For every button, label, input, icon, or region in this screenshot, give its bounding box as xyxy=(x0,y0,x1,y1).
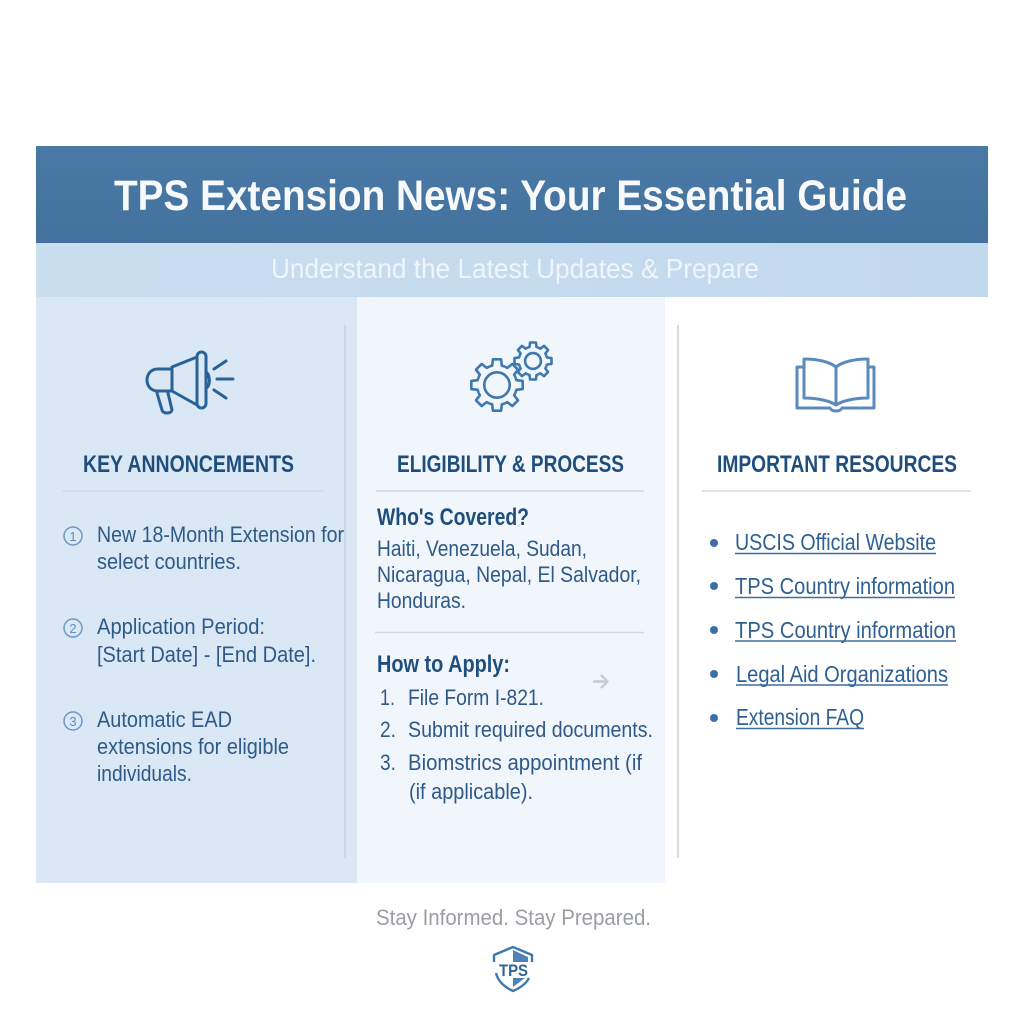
how to apply: 2. xyxy=(380,717,396,742)
who's covered: Who's Covered? xyxy=(377,504,529,531)
item 1: select countries. xyxy=(97,549,241,574)
icon: gears xyxy=(471,343,551,411)
how to apply xyxy=(377,651,653,804)
icon: open book xyxy=(797,359,874,411)
item 3 xyxy=(64,707,289,786)
item 1: 1 xyxy=(69,529,77,544)
heading: key announcements: KEY ANNONCEMENTS xyxy=(83,451,294,478)
item 3: extensions for eligible xyxy=(97,734,289,759)
who's covered: Haiti, Venezuela, Sudan, xyxy=(377,536,587,561)
how to apply: How to Apply: xyxy=(377,651,510,678)
heading: eligibility and process: ELIGIBILITY & PROCESS xyxy=(397,451,624,478)
panel: important resources xyxy=(678,325,971,858)
link: legal aid: Legal Aid Organizations xyxy=(736,661,948,687)
how to apply: Biomstrics appointment (if xyxy=(408,750,643,775)
link: TPS country information: TPS Country information xyxy=(735,573,955,599)
how to apply: File Form I-821. xyxy=(408,685,544,710)
arrow xyxy=(593,675,608,688)
panel: eligibility and process xyxy=(357,297,665,883)
item 2: [Start Date] - [End Date]. xyxy=(97,642,316,667)
title: TPS Extension News: Your Essential Guide xyxy=(114,172,907,220)
how to apply: (if applicable). xyxy=(409,779,533,804)
how to apply: Submit required documents. xyxy=(408,717,653,742)
icon: TPS shield xyxy=(494,947,532,991)
heading: important resources: IMPORTANT RESOURCES xyxy=(717,451,957,478)
item 1 xyxy=(64,522,344,574)
link: USCIS: USCIS Official Website xyxy=(735,529,936,555)
who's covered: Honduras. xyxy=(377,588,466,613)
how to apply: 3. xyxy=(380,750,396,775)
subtitle: Understand the Latest Updates & Prepare xyxy=(271,253,759,284)
link: TPS country information: TPS Country information xyxy=(735,617,956,643)
how to apply: 1. xyxy=(380,685,395,710)
item 3: Automatic EAD xyxy=(97,707,232,732)
item 3: 3 xyxy=(69,714,77,729)
who's covered xyxy=(377,504,641,613)
who's covered: Nicaragua, Nepal, El Salvador, xyxy=(377,562,641,587)
subtitle band xyxy=(36,243,988,297)
icon: megaphone xyxy=(147,352,233,413)
item 2 xyxy=(64,614,316,667)
icon: TPS shield: TPS xyxy=(499,961,528,980)
item 3: individuals. xyxy=(97,761,192,786)
footer tagline: Stay Informed. Stay Prepared. xyxy=(376,905,651,930)
item 1: New 18-Month Extension for xyxy=(97,522,344,547)
item 2: 2 xyxy=(69,621,77,636)
link: extension FAQ: Extension FAQ xyxy=(736,704,864,730)
header banner xyxy=(36,146,988,243)
panel: key announcements xyxy=(36,297,357,883)
item 2: Application Period: xyxy=(97,614,265,639)
